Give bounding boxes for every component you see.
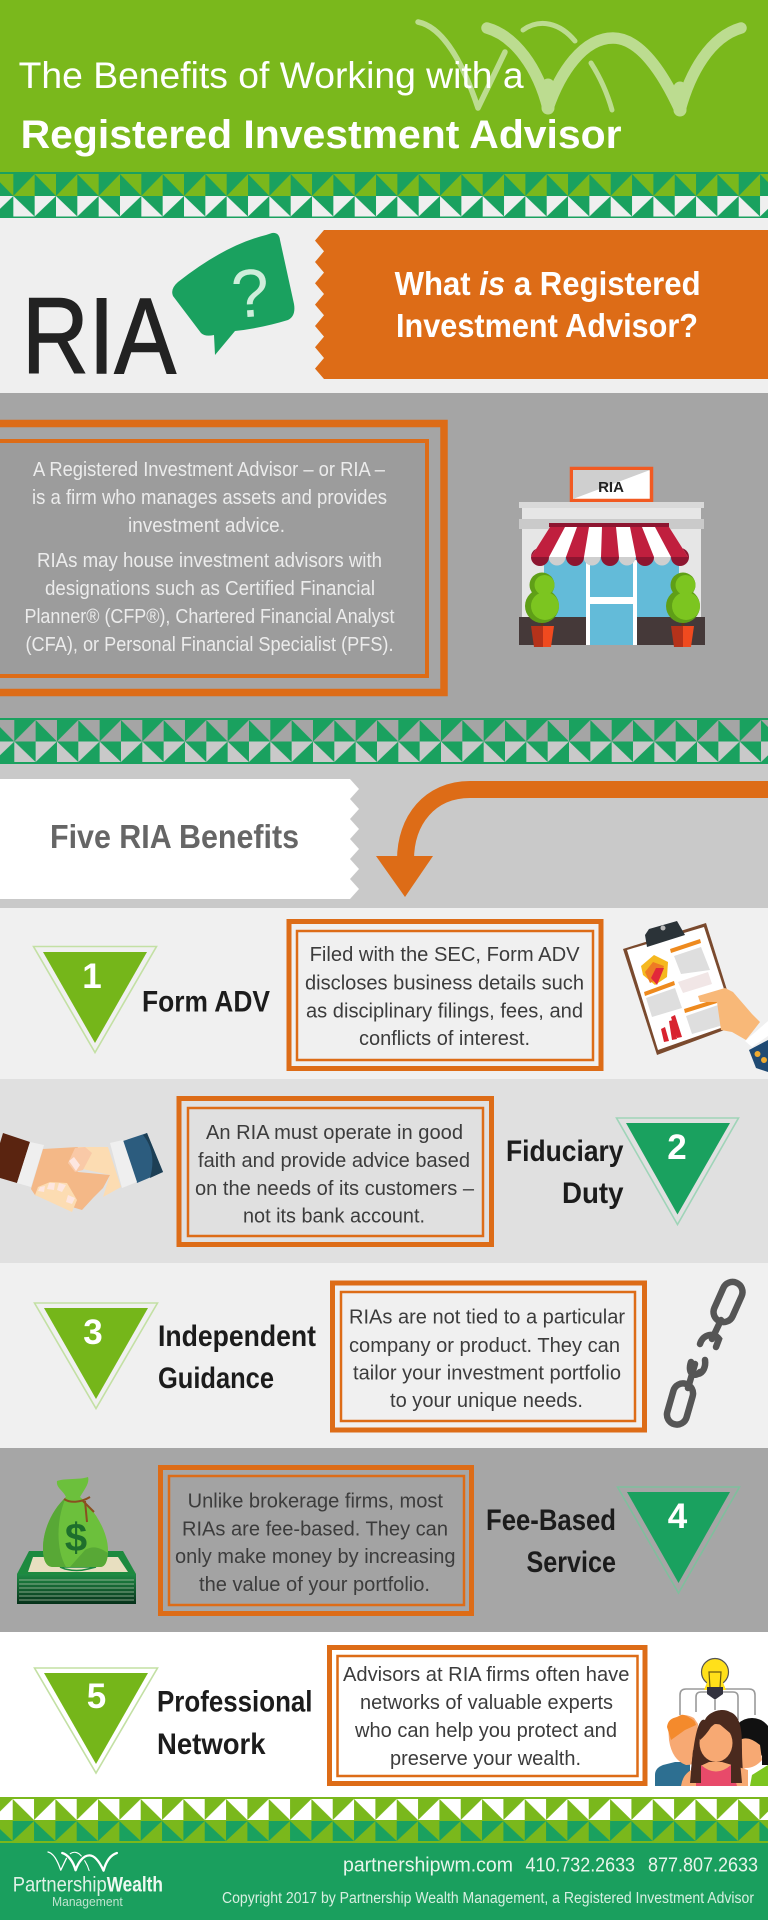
callout: fiduciary duty text: on the needs of its customers – <box>195 1178 475 1200</box>
callout: professional network text: networks of valuable experts <box>360 1692 613 1714</box>
icon: number 5 triangle: 5 <box>87 1677 106 1716</box>
callout: independent guidance text: tailor your investment portfolio <box>353 1362 621 1384</box>
callout: definition text box: designations such as Certified Financial <box>45 578 375 600</box>
callout: form ADV text: conflicts of interest. <box>359 1028 530 1050</box>
text: company name: Wealth <box>107 1874 163 1897</box>
banner: five RIA benefits: Five RIA Benefits <box>50 818 299 855</box>
callout: definition text box: A Registered Investment Advisor – or RIA – <box>33 459 386 481</box>
callout: independent guidance text: to your unique needs. <box>390 1390 583 1412</box>
icon: number 4 triangle: 4 <box>668 1497 688 1536</box>
icon: question speech bubble: ? <box>229 255 272 333</box>
banner: five RIA benefits <box>0 779 359 899</box>
text: company name: Management <box>52 1894 123 1909</box>
callout: form ADV text: Filed with the SEC, Form ADV <box>310 944 580 966</box>
callout: professional network text: preserve your wealth. <box>390 1748 581 1770</box>
heading: professional network: Professional <box>157 1686 312 1719</box>
heading: title line two: Registered Investment Advisor <box>21 113 622 157</box>
callout: definition text box: investment advice. <box>128 515 285 537</box>
callout: form ADV text <box>289 922 601 1068</box>
heading: fiduciary duty <box>506 1135 624 1210</box>
panel: header <box>0 0 768 172</box>
icon: number 4 triangle <box>618 1487 740 1593</box>
callout: professional network text: who can help you protect and <box>354 1720 617 1742</box>
icon: question speech bubble <box>172 233 294 355</box>
heading: fee-based service <box>486 1504 616 1579</box>
heading: independent guidance <box>158 1320 316 1395</box>
callout: fiduciary duty text: An RIA must operate in good <box>206 1122 463 1144</box>
callout: fee-based text: only make money by increasing <box>175 1546 456 1568</box>
text: contact details: 877.807.2633 <box>648 1855 758 1877</box>
callout: definition text box: (CFA), or Personal Financial Specialist (PFS). <box>26 634 394 656</box>
icon: number 1 triangle: 1 <box>82 957 102 996</box>
callout: fee-based text: RIAs are fee-based. They can <box>182 1519 448 1541</box>
callout: fiduciary duty text <box>179 1098 492 1244</box>
icon: RIA storefront <box>519 468 705 647</box>
banner: orange question heading: What is a Registered <box>395 265 701 302</box>
callout: definition text box <box>0 424 444 692</box>
callout: professional network text: Advisors at RIA firms often have <box>343 1664 629 1686</box>
panel: benefit 4 fee-based service <box>0 1448 768 1632</box>
icon: number 2 triangle <box>616 1118 738 1224</box>
heading: fiduciary duty: Duty <box>562 1177 624 1210</box>
icon: clipboard in hand <box>623 921 768 1072</box>
heading: fiduciary duty: Fiduciary <box>506 1135 624 1168</box>
icon: footer logo <box>48 1852 117 1871</box>
divider band: bottom triangles <box>0 1797 768 1843</box>
callout: definition text box: Planner® (CFP®), Chartered Financial Analyst <box>24 606 395 628</box>
icon: number 1 triangle <box>34 946 156 1052</box>
icon: handshake <box>0 1133 163 1212</box>
text: company name: Partnership <box>13 1874 107 1897</box>
callout: fiduciary duty text: not its bank account. <box>243 1206 425 1228</box>
panel: five benefits heading <box>0 764 768 908</box>
panel: benefit 1 form ADV <box>0 908 768 1079</box>
icon: number 3 triangle: 3 <box>83 1313 103 1352</box>
heading: title line one: The Benefits of Working with a <box>19 55 524 96</box>
panel: RIA definition <box>0 393 768 718</box>
text: contact details: partnershipwm.com <box>343 1855 513 1877</box>
callout: fee-based text: the value of your portfolio. <box>199 1574 430 1596</box>
heading: professional network <box>157 1686 312 1761</box>
icon: header logo watermark <box>418 22 741 110</box>
text: contact details: 410.732.2633 <box>526 1855 635 1877</box>
heading: form ADV: Form ADV <box>142 986 270 1018</box>
panel: benefit 2 fiduciary duty <box>0 1079 768 1263</box>
callout: form ADV text: discloses business details such <box>305 972 584 994</box>
callout: form ADV text: as disciplinary filings, fees, and <box>306 1000 583 1022</box>
callout: fee-based text <box>160 1468 472 1614</box>
icon: broken chain <box>665 1279 746 1427</box>
icon: number 5 triangle <box>34 1668 158 1773</box>
heading: professional network: Network <box>157 1728 266 1761</box>
callout: independent guidance text: RIAs are not tied to a particular <box>349 1307 625 1329</box>
icon: money bag on cash stack <box>17 1477 136 1604</box>
callout: fee-based text: Unlike brokerage firms, most <box>188 1491 443 1513</box>
heading: fee-based service: Service <box>526 1546 616 1579</box>
callout: independent guidance text: company or product. They can <box>349 1335 620 1357</box>
callout: professional network text <box>330 1648 645 1784</box>
heading: fee-based service: Fee-Based <box>486 1504 616 1537</box>
panel: benefit 3 independent guidance <box>0 1263 768 1448</box>
icon: number 2 triangle: 2 <box>667 1128 687 1167</box>
text: contact details <box>343 1855 758 1877</box>
callout: definition text box: RIAs may house investment advisors with <box>37 550 382 572</box>
panel: footer <box>0 1843 768 1920</box>
icon: number 3 triangle <box>34 1303 158 1408</box>
text: RIA logotype: RIA <box>22 275 176 396</box>
callout: independent guidance text <box>332 1283 644 1430</box>
divider band: middle triangles <box>0 718 768 764</box>
icon: money bag on cash stack: $ <box>65 1516 87 1560</box>
icon: RIA storefront: RIA <box>598 479 624 496</box>
panel: what is an RIA <box>0 218 768 396</box>
banner: orange question heading: Investment Advisor? <box>396 307 698 344</box>
arrow: orange down arrow <box>376 790 768 897</box>
callout: fiduciary duty text: faith and provide advice based <box>198 1150 470 1172</box>
divider band: top triangles <box>0 172 768 218</box>
callout: definition text box: is a firm who manages assets and provides <box>32 487 387 509</box>
text: company name <box>13 1874 163 1909</box>
heading: independent guidance: Guidance <box>158 1362 274 1395</box>
heading: independent guidance: Independent <box>158 1320 316 1353</box>
banner: orange question heading <box>315 230 768 379</box>
icon: people with lightbulb <box>655 1658 768 1786</box>
panel: benefit 5 professional network <box>0 1632 768 1797</box>
